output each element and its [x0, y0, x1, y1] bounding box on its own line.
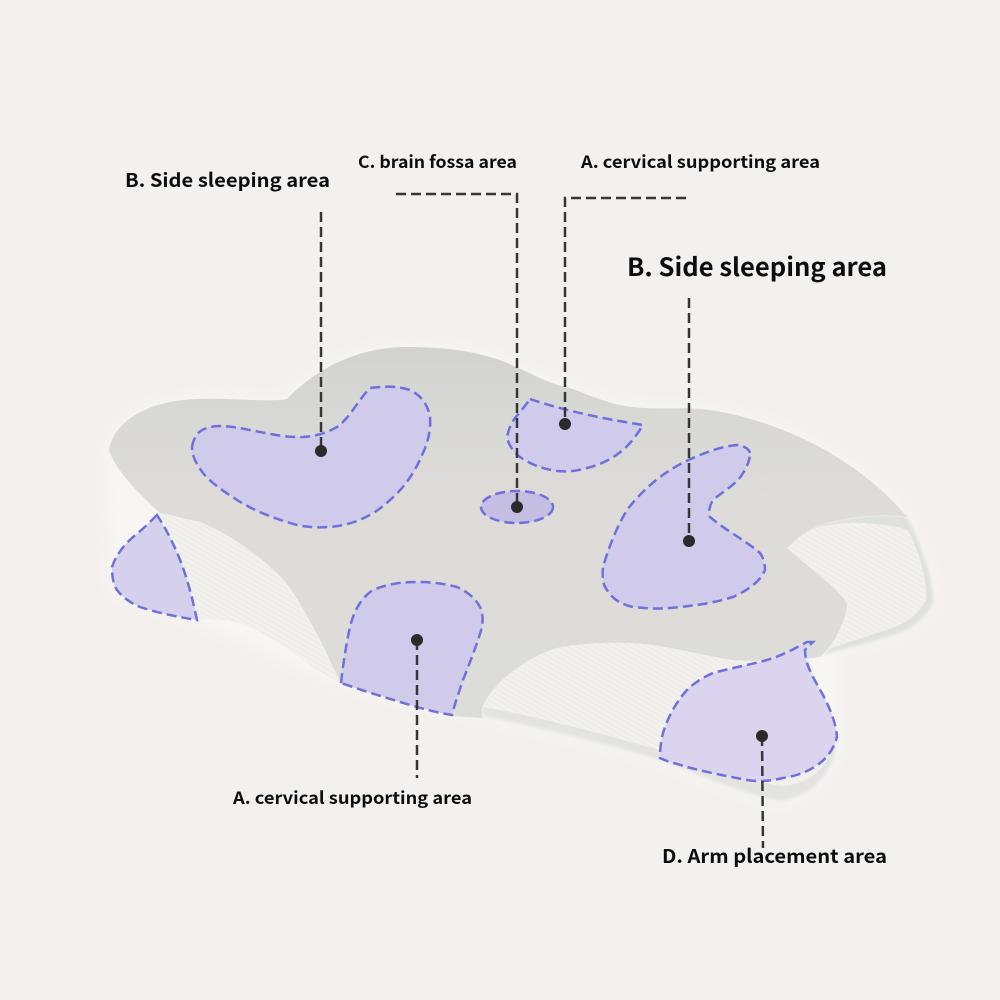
leader: A cervical top	[559, 198, 686, 430]
area: A cervical front	[341, 582, 483, 715]
label: D arm placement: D. Arm placement area	[662, 842, 887, 869]
pillow top surface	[109, 347, 907, 718]
area: A cervical side	[112, 515, 197, 620]
leader: C brain fossa	[396, 194, 523, 513]
front side base	[482, 643, 837, 801]
area: A cervical top	[507, 399, 643, 471]
leader: D arm placement	[756, 730, 768, 848]
area: D arm placement	[660, 642, 837, 781]
leader: B side sleeping left	[315, 212, 327, 457]
right knit side base	[787, 515, 933, 655]
leader: B side sleeping right	[683, 298, 695, 547]
right knit side	[787, 523, 926, 650]
label: B side sleeping left: B. Side sleeping area	[125, 166, 330, 193]
left knit side	[160, 513, 341, 684]
pillow illustration	[109, 347, 933, 802]
label: B side sleeping right: B. Side sleeping area	[627, 248, 887, 284]
label: C brain fossa: C. brain fossa area	[358, 148, 517, 173]
label: A cervical top: A. cervical supporting area	[580, 148, 820, 173]
soft halo	[109, 347, 933, 802]
front knit	[482, 643, 835, 786]
area: B side sleeping right	[603, 445, 765, 608]
area: C brain fossa	[481, 491, 553, 523]
leader: A cervical front	[411, 634, 423, 778]
area: B side sleeping left	[192, 387, 430, 527]
label: A cervical front: A. cervical supporting area	[232, 784, 472, 809]
